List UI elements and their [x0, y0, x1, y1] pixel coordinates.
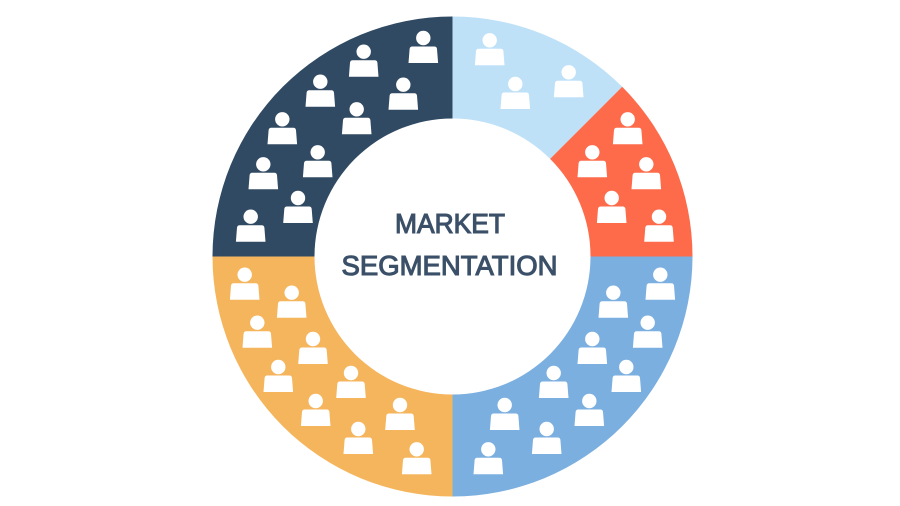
- title: SEGMENTATION: [342, 250, 558, 281]
- title: MARKET: [395, 208, 505, 239]
- icon: person: [644, 210, 674, 242]
- icon: person: [578, 145, 607, 177]
- panel: coral segment: [550, 87, 692, 256]
- icon: person: [475, 33, 504, 65]
- icon: person: [500, 77, 530, 109]
- icon: person: [578, 332, 607, 364]
- icon: person: [336, 366, 366, 398]
- icon: person: [574, 394, 604, 426]
- icon: person: [306, 74, 335, 107]
- icon: person: [597, 191, 626, 223]
- panel: dark navy segment: [212, 16, 452, 256]
- icon: person: [539, 366, 568, 398]
- title: [342, 208, 558, 281]
- icon: person: [277, 286, 306, 318]
- icon: person: [474, 442, 503, 474]
- icon: person: [303, 145, 332, 177]
- icon: person: [632, 157, 661, 189]
- icon: person: [532, 422, 562, 454]
- icon: person: [283, 191, 313, 223]
- icon: person: [385, 398, 415, 430]
- icon: person: [613, 112, 642, 144]
- icon: person: [598, 286, 628, 318]
- icon: person: [388, 78, 418, 110]
- icon: person: [490, 398, 520, 430]
- icon: person: [230, 268, 260, 300]
- icon: person: [248, 157, 278, 189]
- icon: person: [646, 268, 675, 300]
- icon: person: [554, 65, 584, 97]
- icon: person: [612, 360, 641, 392]
- icon: person: [349, 44, 378, 77]
- icon: person: [408, 31, 438, 63]
- icon: person: [242, 316, 272, 348]
- icon: person: [264, 360, 293, 392]
- icon: person: [344, 422, 373, 454]
- panel: blue segment: [452, 256, 692, 496]
- icon: person: [236, 210, 266, 242]
- icon: person: [633, 316, 662, 348]
- icon: person: [402, 442, 432, 474]
- icon: person: [298, 332, 328, 364]
- panel: orange segment: [212, 256, 452, 496]
- icon: person: [301, 394, 330, 426]
- icon: person: [342, 102, 372, 134]
- panel: light blue segment: [452, 16, 622, 159]
- icon: person: [268, 112, 297, 144]
